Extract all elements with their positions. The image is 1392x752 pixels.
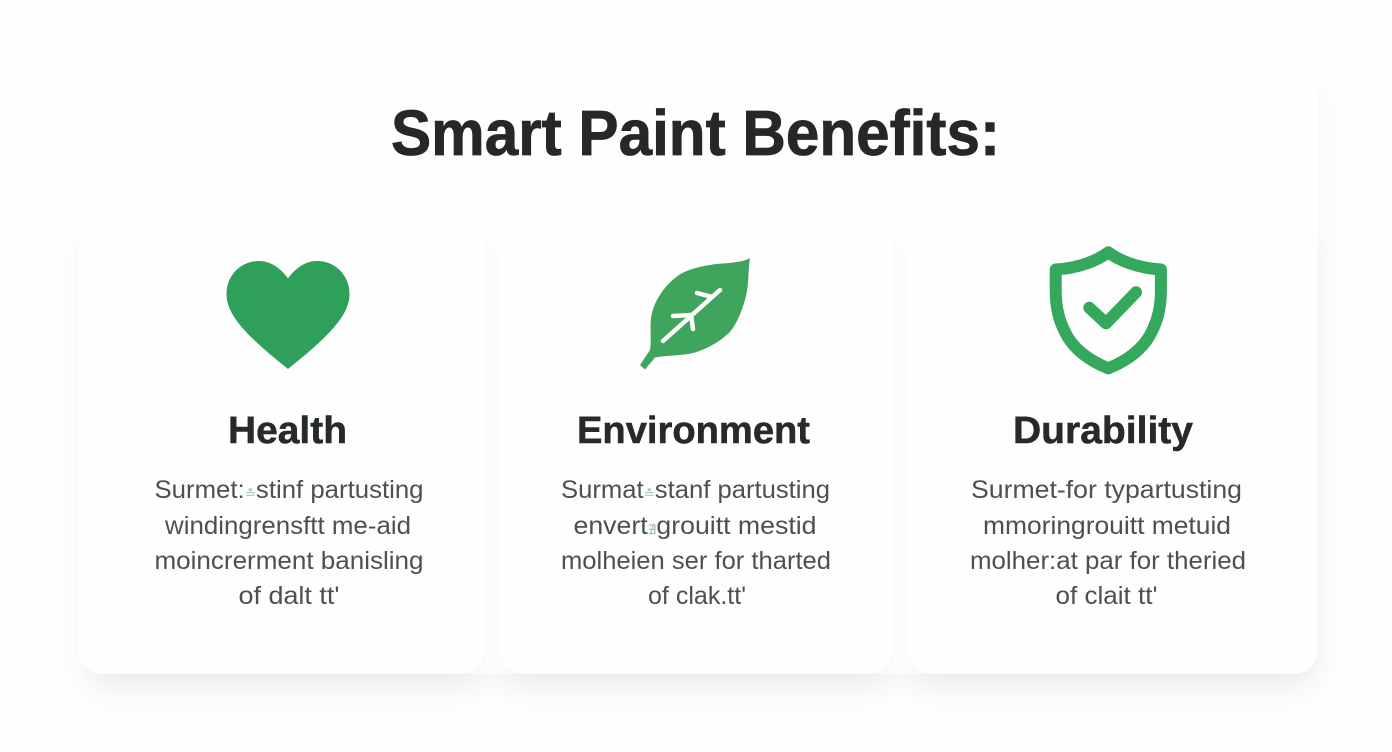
body text: environment: Surmat≛stanf partusting (561, 476, 830, 504)
panel: health card (78, 205, 485, 674)
body text: health (154, 476, 424, 610)
body text: durability: Surmet-for typartusting (971, 476, 1242, 504)
body text: health: of dalt tt' (238, 582, 340, 610)
title: Smart Paint Benefits: (391, 97, 1000, 169)
body text: environment: molheien ser for tharted (561, 547, 831, 575)
panel: durability card (907, 205, 1318, 674)
heading: durability: Durability (1013, 410, 1193, 452)
body text: durability (970, 476, 1246, 610)
card text: durability (970, 410, 1246, 610)
body text: durability: mmoringrouitt metuid (983, 512, 1231, 540)
body text: health: Surmet:≛stinf partusting (154, 476, 424, 504)
icon: heart (226, 261, 350, 369)
body text: durability: molher:at par for theried (970, 547, 1246, 575)
panel: environment card (499, 205, 893, 674)
icon: leaf (640, 258, 750, 370)
body text: environment: envert ∄grouitt mestid (574, 512, 816, 540)
heading: environment: Environment (577, 410, 810, 452)
body text: health: moincrerment banisling (154, 547, 424, 575)
body text: environment (561, 476, 831, 610)
card text: health (154, 410, 424, 610)
body text: environment: of clak.tt' (648, 582, 746, 610)
body text: health: windingrensftt me-aid (164, 512, 411, 540)
panel: outer container (78, 70, 1318, 674)
card text: environment (561, 410, 831, 610)
body text: durability: of clait tt' (1056, 582, 1158, 610)
icon: shield with check (1056, 252, 1161, 368)
heading: health: Health (228, 410, 347, 452)
